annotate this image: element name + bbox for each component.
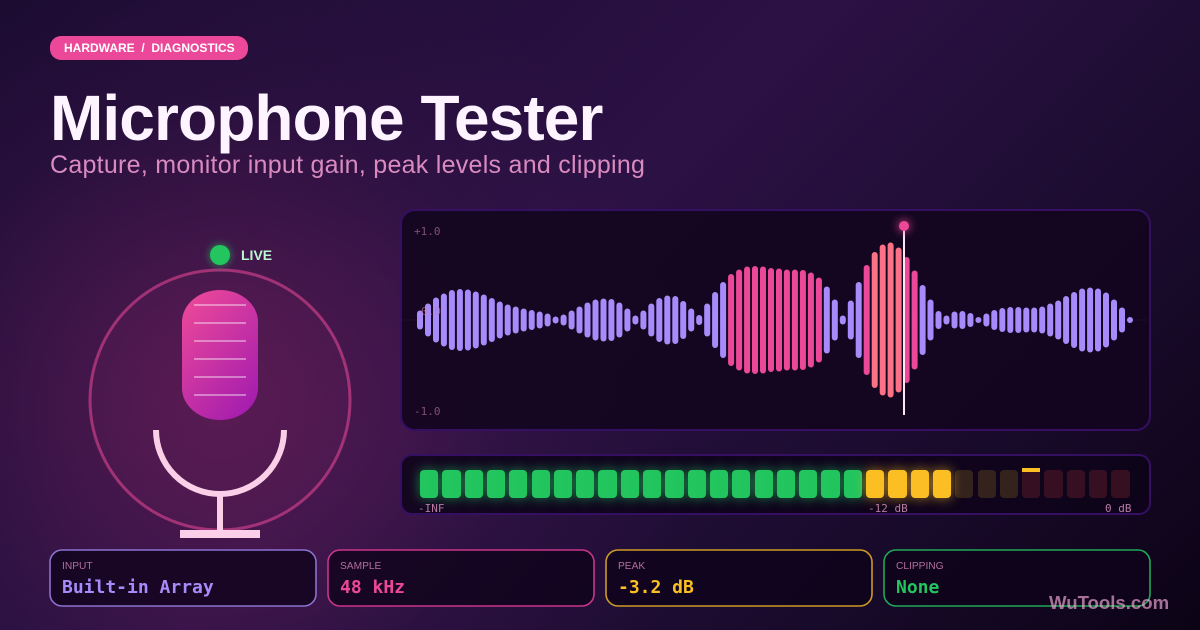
waveform panel (400, 209, 1151, 431)
stat card: clipping: CLIPPING (896, 561, 944, 572)
watermark: WuTools.com (1049, 592, 1169, 613)
stand (156, 430, 284, 538)
stat card: sample (327, 549, 595, 607)
axis labels: +1.0 (414, 225, 440, 238)
stat card: clipping: None (896, 576, 939, 598)
stat card: sample: 48 kHz (340, 576, 405, 598)
stat card: peak (605, 549, 873, 607)
capsule (182, 290, 258, 420)
category tag (50, 36, 248, 60)
stat card: clipping (883, 549, 1151, 607)
stat card: input (49, 549, 317, 607)
stat card: peak: PEAK (618, 561, 645, 572)
title: Microphone Tester (50, 82, 602, 154)
stat card: sample: SAMPLE (340, 561, 381, 572)
level meter panel: -INF (418, 502, 444, 515)
level meter panel: -12 dB (868, 502, 908, 515)
axis labels: 0.0 (421, 305, 441, 318)
level meter panel: 0 dB (1105, 502, 1132, 515)
stat card: input: INPUT (62, 561, 93, 572)
live indicator: LIVE (241, 247, 272, 263)
axis labels: -1.0 (414, 405, 440, 418)
stat card: peak: -3.2 dB (618, 576, 694, 598)
waveform bars (417, 242, 1133, 398)
stat card: input: Built-in Array (62, 576, 214, 598)
ring (90, 270, 350, 530)
subtitle: Capture, monitor input gain, peak levels and clipping (50, 150, 645, 178)
playhead (897, 219, 911, 415)
category tag: HARDWARE / DIAGNOSTICS (64, 41, 235, 55)
microphone illustration (88, 240, 352, 538)
live indicator (209, 244, 272, 266)
axis labels (414, 225, 441, 418)
